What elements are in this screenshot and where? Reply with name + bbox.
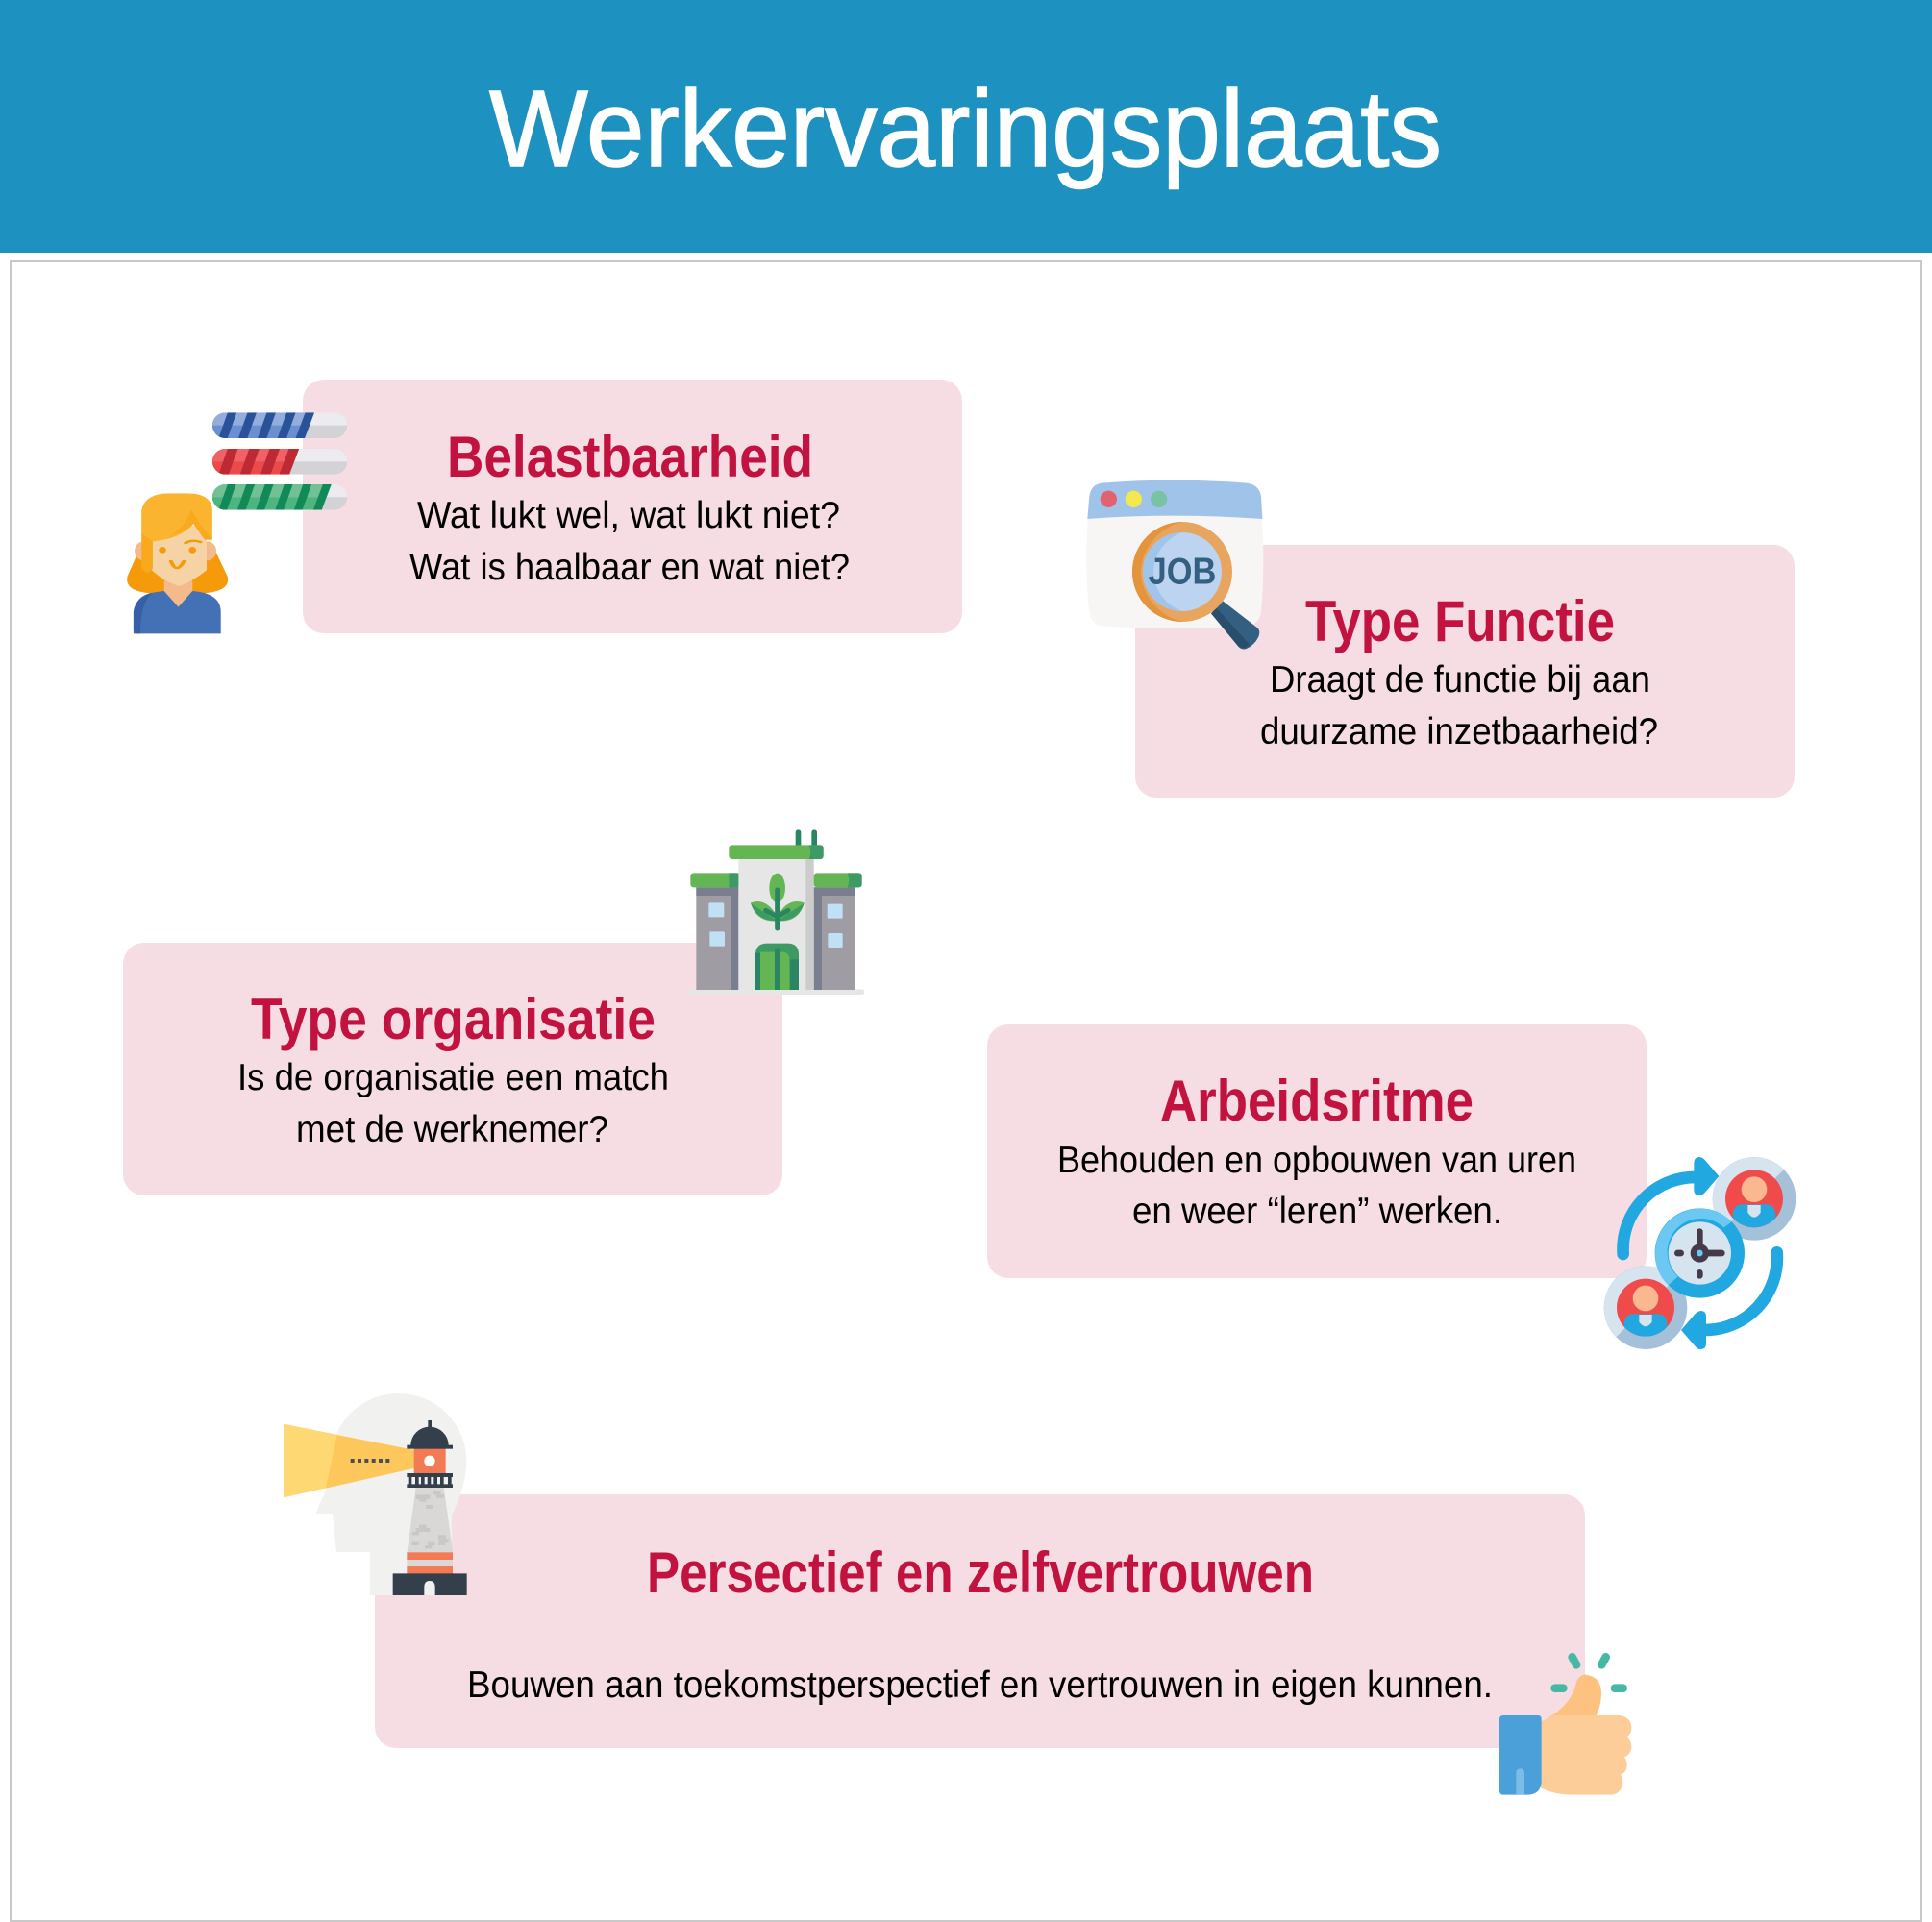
panel background: [375, 1494, 1585, 1748]
body text: Bouwen aan toekomstperspectief en vertrouwen in eigen kunnen.: [467, 1664, 1493, 1706]
panel background: [1135, 545, 1795, 798]
magnifier lens: [1132, 522, 1232, 622]
body text: [409, 495, 850, 588]
body text: duurzame inzetbaarheid?: [1260, 711, 1658, 752]
JOB label: JOB: [1149, 550, 1216, 592]
person bottom left: [1604, 1266, 1687, 1349]
panel background: [303, 380, 962, 633]
blue bar: [212, 412, 347, 438]
red bar: [212, 449, 347, 475]
clock: [1655, 1208, 1745, 1298]
lighthouse: [393, 1420, 467, 1595]
icon: woman with capacity bars: [127, 412, 347, 633]
body text: [237, 1057, 669, 1150]
body text: [1057, 1140, 1576, 1232]
body text: en weer “leren” werken.: [1132, 1191, 1502, 1232]
body text: Is de organisatie een match: [237, 1057, 669, 1098]
woman figure: [127, 493, 228, 633]
icon: green organisation building: [688, 829, 864, 995]
panel: Belastbaarheid: [303, 380, 962, 633]
body text: met de werknemer?: [296, 1109, 608, 1150]
cuff: [1499, 1715, 1542, 1795]
leaf emblem: [751, 874, 805, 928]
icon: lighthouse and head: [284, 1393, 467, 1595]
icon: job search window: [1086, 480, 1263, 649]
magnifier handle: [1211, 601, 1259, 649]
body text: [1260, 659, 1658, 752]
hand: [1541, 1715, 1631, 1795]
panel: Type Functie: [1135, 545, 1795, 798]
sparkle marks: [1555, 1657, 1623, 1688]
person top right: [1713, 1157, 1796, 1241]
thumb: [1541, 1675, 1601, 1730]
title: Werkervaringsplaats: [489, 68, 1442, 189]
icon: thumbs up: [1499, 1657, 1631, 1795]
heading: Type Functie: [1305, 589, 1615, 653]
panel background: [987, 1024, 1647, 1278]
heading: Persectief en zelfvertrouwen: [647, 1540, 1314, 1605]
panel: Type organisatie: [123, 943, 782, 1195]
panel: Persectief en zelfvertrouwen: [375, 1494, 1585, 1748]
panel background: [123, 943, 782, 1195]
icon: work rhythm clock with people: [1604, 1157, 1796, 1349]
heading: Type organisatie: [251, 987, 656, 1051]
body text: Wat is haalbaar en wat niet?: [409, 547, 850, 588]
heading: Belastbaarheid: [447, 425, 813, 489]
cycle arrows: [1622, 1157, 1777, 1349]
green bar: [212, 484, 347, 510]
door: [755, 944, 799, 990]
body text: Wat lukt wel, wat lukt niet?: [417, 495, 840, 536]
body text: Behouden en opbouwen van uren: [1057, 1140, 1576, 1181]
light beam: [284, 1424, 415, 1497]
head silhouette: [315, 1393, 466, 1595]
heading: Arbeidsritme: [1160, 1069, 1474, 1133]
body text: Draagt de functie bij aan: [1270, 659, 1650, 701]
header band: [0, 0, 1932, 253]
panel: Arbeidsritme: [987, 1024, 1647, 1278]
